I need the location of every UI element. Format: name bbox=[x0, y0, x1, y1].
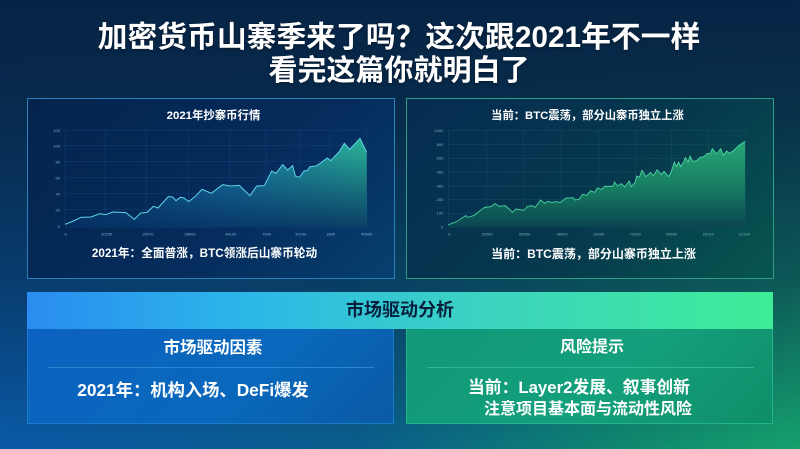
area chart: current market: 48000 bbox=[556, 231, 568, 236]
text: current risks: 当前：Layer2发展、叙事创新 bbox=[468, 378, 690, 397]
area chart: current market: 20010 bbox=[703, 231, 715, 236]
area chart: current market: 20200 bbox=[481, 231, 493, 236]
panel: market driving factors bbox=[27, 329, 394, 424]
panel: 2021 chart bbox=[27, 98, 395, 279]
area chart: 2021 altcoin market: 7000 bbox=[262, 231, 272, 236]
area chart: 2021 altcoin market: 20070 bbox=[142, 231, 154, 236]
title: 加密货币山寨季来了吗？这次跟2021年不一样 bbox=[98, 21, 700, 54]
area chart: 2021 altcoin market: 100 bbox=[53, 143, 61, 148]
area chart: 2021 altcoin market: 30700 bbox=[295, 231, 307, 236]
text: 2021 drivers: 2021年：机构入场、DeFi爆发 bbox=[77, 380, 309, 400]
area chart: current market: 1000 bbox=[434, 128, 444, 133]
area chart: current market: 400 bbox=[437, 183, 444, 188]
heading: 2021 chart title: 2021年抄寨币行情 bbox=[167, 110, 260, 122]
area chart: 2021 altcoin market: 0 bbox=[58, 224, 61, 229]
area chart: 2021 altcoin market: 40 bbox=[56, 191, 61, 196]
area chart: current market: 16000 bbox=[593, 231, 605, 236]
area chart: 2021 altcoin market: 60 bbox=[56, 175, 61, 180]
area chart: current market: 12100 bbox=[739, 231, 751, 236]
heading: market driving factors: 市场驱动因素 bbox=[164, 339, 262, 357]
area chart: current market: 0 bbox=[448, 231, 451, 236]
area chart: 2021 altcoin market: 1800 bbox=[326, 231, 336, 236]
area chart: 2021 altcoin market: 28000 bbox=[184, 231, 196, 236]
area chart: 2021 altcoin market: 20 bbox=[56, 207, 61, 212]
area chart: current market: 0 bbox=[441, 224, 444, 229]
area chart: current market: 500 bbox=[437, 156, 444, 161]
text: current risks: 注意项目基本面与流动性风险 bbox=[484, 401, 692, 418]
panel: risk warning bbox=[406, 329, 773, 424]
area chart: 2021 altcoin market: 0 bbox=[65, 231, 68, 236]
area chart: current market: 100 bbox=[437, 211, 444, 216]
area chart: 2021 altcoin market: 45500 bbox=[361, 231, 373, 236]
area chart: current market: 60050 bbox=[519, 231, 531, 236]
area chart: current market: 20600 bbox=[666, 231, 678, 236]
area chart: current market: 800 bbox=[437, 142, 444, 147]
heading: current chart title: 当前：BTC震荡，部分山寨币独立上涨 bbox=[491, 110, 684, 122]
area chart: 2021 altcoin market bbox=[53, 128, 373, 236]
area chart: 2021 altcoin market: 20150 bbox=[101, 231, 113, 236]
title bbox=[98, 21, 700, 87]
area chart: current market: 400 bbox=[437, 169, 444, 174]
text: current risks bbox=[468, 378, 692, 418]
heading: risk warning: 风险提示 bbox=[560, 339, 624, 356]
area chart: current market: 200 bbox=[437, 197, 444, 202]
panel: current chart bbox=[406, 98, 774, 279]
area chart: current market bbox=[434, 128, 751, 236]
heading: banner title: 市场驱动分析 bbox=[346, 300, 454, 320]
chart caption: 2021: 2021年：全面普涨，BTC领涨后山寨币轮动 bbox=[92, 247, 317, 260]
area chart: 2021 altcoin market: 80 bbox=[56, 159, 61, 164]
panel: market drivers analysis banner bbox=[27, 292, 773, 329]
area chart: 2021 altcoin market: 48100 bbox=[225, 231, 237, 236]
title: 看完这篇你就明白了 bbox=[268, 55, 530, 87]
area chart: current market: 72000 bbox=[630, 231, 642, 236]
area chart: 2021 altcoin market: 100 bbox=[53, 128, 61, 133]
chart caption: current: 当前：BTC震荡，部分山寨币独立上涨 bbox=[491, 247, 696, 261]
